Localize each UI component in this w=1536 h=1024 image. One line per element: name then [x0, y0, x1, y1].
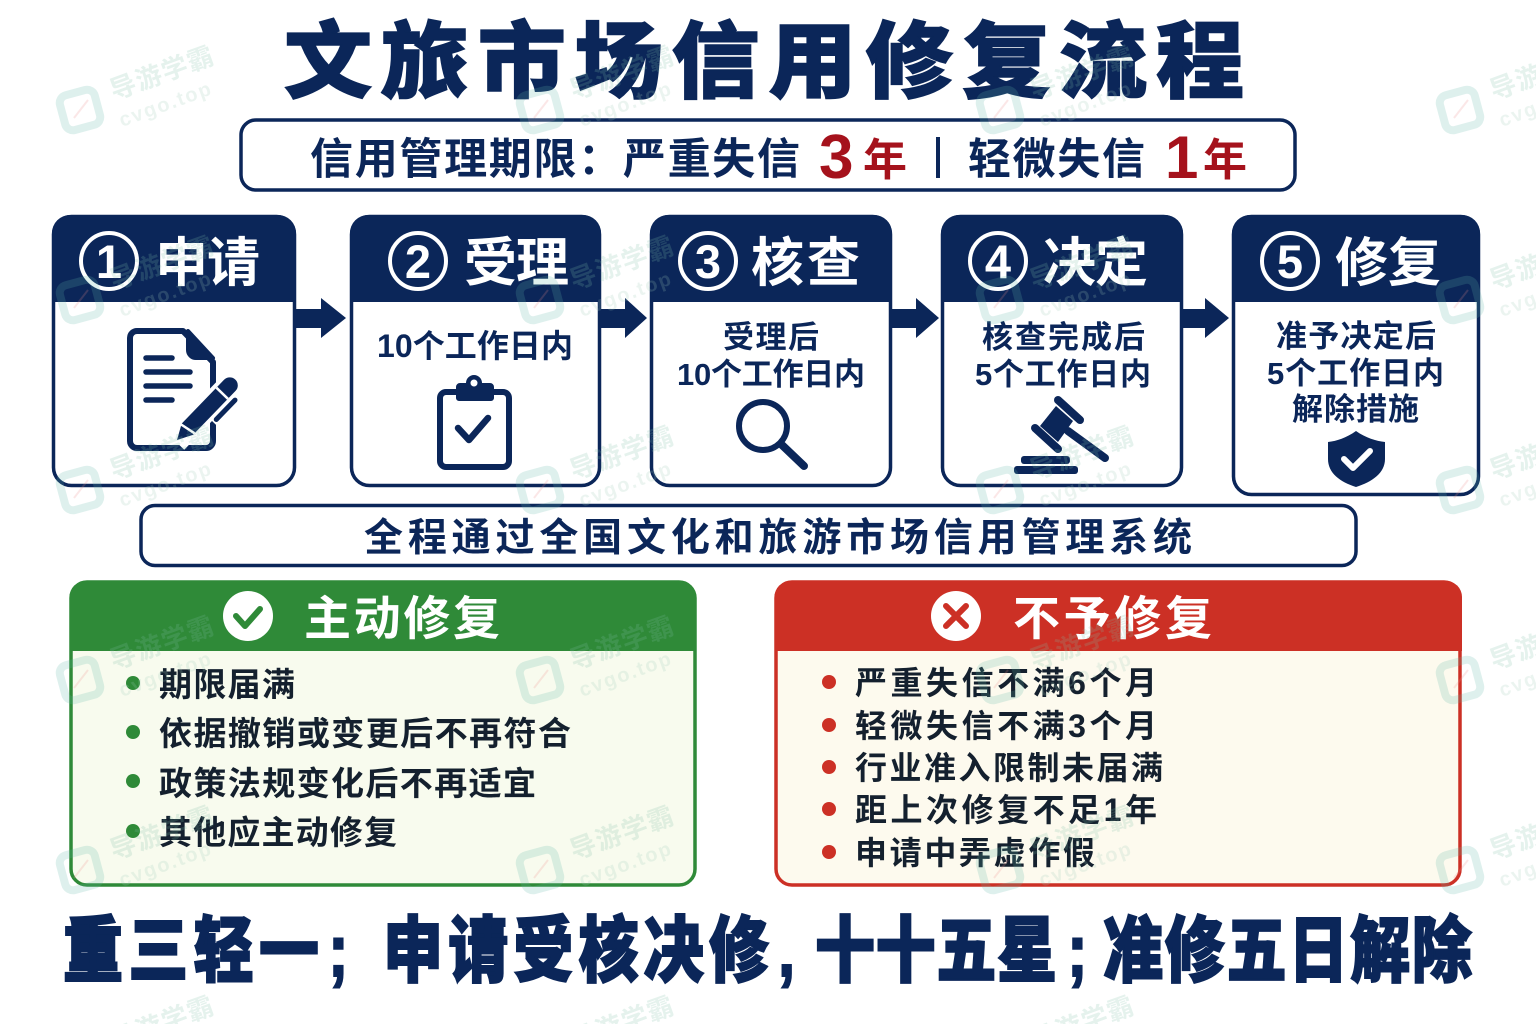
- text: 导游学霸: [1026, 41, 1138, 106]
- list: refusal conditions: 申请中弄虚作假: [855, 835, 1095, 871]
- title: 文旅市场信用修复流程: [284, 16, 1244, 110]
- text: cvgo.top: [1036, 268, 1134, 322]
- text: cvgo.top: [116, 78, 214, 132]
- text: cvgo.top: [1036, 458, 1134, 512]
- text: 导游学霸: [106, 421, 218, 486]
- text: 导游学霸: [566, 231, 678, 296]
- footer mnemonic: ;: [328, 909, 349, 992]
- text: cvgo.top: [1036, 838, 1134, 892]
- step 5 card: 修复: 修复: [1335, 234, 1441, 293]
- icon: document with pen: [130, 331, 252, 457]
- step 4 card: 决定: 决定: [1043, 234, 1148, 293]
- text: cvgo.top: [1036, 648, 1134, 702]
- heading: 不予修复: 不予修复: [1013, 592, 1212, 645]
- text: 导游学霸: [1026, 231, 1138, 296]
- footer mnemonic: 申请受核决修: [383, 912, 769, 992]
- panel: 主动修复: [70, 581, 696, 885]
- system banner: [141, 506, 1356, 566]
- step 3 time limit: [677, 320, 865, 392]
- subtitle banner: credit management period: 信用管理期限：严重失信: [310, 136, 800, 184]
- icon: clipboard with check: [440, 375, 509, 467]
- footer mnemonic: [63, 909, 1472, 992]
- text: 导游学霸: [106, 41, 218, 106]
- step 1 card: 申请: 申请: [155, 234, 260, 293]
- step 3 card: 核查: 3: [695, 235, 721, 288]
- list: repair conditions: 期限届满: [159, 666, 295, 703]
- step 3 card: 核查: 核查: [751, 234, 860, 293]
- arrow: step 4 to 5: [1183, 298, 1229, 338]
- subtitle banner: credit management period: [241, 120, 1295, 192]
- text: cvgo.top: [576, 648, 674, 702]
- step 1 card: 申请: 1: [96, 235, 122, 288]
- arrow: step 1 to 2: [295, 298, 346, 338]
- step 1 card: 申请: [52, 215, 296, 486]
- text: 导游学霸: [566, 611, 678, 676]
- text: cvgo.top: [116, 268, 214, 322]
- text: 导游学霸: [106, 611, 218, 676]
- step 5 time limit: 5个工作日内: [1267, 356, 1444, 391]
- footer mnemonic: 重三轻一: [63, 912, 319, 992]
- step 5 time limit: 准予决定后: [1276, 319, 1436, 354]
- step 2 card: 受理: [350, 215, 601, 486]
- step 4 card: 决定: [941, 215, 1183, 486]
- subtitle banner: credit management period: 1: [1165, 124, 1198, 191]
- footer mnemonic: 十十五星: [815, 912, 1057, 992]
- subtitle banner: credit management period: 年: [863, 136, 907, 185]
- text: 导游学霸: [566, 421, 678, 486]
- step 3 time limit: 10个工作日内: [677, 357, 865, 392]
- text: 导游学霸: [566, 41, 678, 106]
- footer mnemonic: 准修五日解除: [1103, 912, 1472, 992]
- list: repair conditions: 依据撤销或变更后不再符合: [159, 715, 571, 752]
- step 5 card: 修复: 5: [1277, 235, 1303, 288]
- subtitle banner: credit management period: 3: [819, 123, 853, 192]
- text: cvgo.top: [576, 838, 674, 892]
- heading: 主动修复: 主动修复: [304, 592, 500, 645]
- text: cvgo.top: [576, 458, 674, 512]
- text: cvgo.top: [1036, 78, 1134, 132]
- text: 导游学霸: [106, 801, 218, 866]
- text: cvgo.top: [116, 458, 214, 512]
- step 2 card: 受理: 受理: [464, 234, 569, 293]
- step 5 card: 修复: [1232, 215, 1480, 494]
- text: 导游学霸: [1026, 801, 1138, 866]
- list: refusal conditions: 距上次修复不足1年: [855, 792, 1157, 828]
- step 3 card: 核查: [650, 215, 892, 486]
- arrow: step 2 to 3: [600, 298, 647, 338]
- step 5 time limit: [1267, 319, 1444, 427]
- step 2 card: 受理: 2: [405, 235, 431, 288]
- text: 导游学霸: [1026, 611, 1138, 676]
- icon: gavel: [1014, 400, 1105, 474]
- footer mnemonic: ,: [778, 909, 795, 992]
- system banner: 全程通过全国文化和旅游市场信用管理系统: [364, 517, 1192, 560]
- step 4 card: 决定: 4: [985, 235, 1011, 288]
- list: refusal conditions: 行业准入限制未届满: [855, 750, 1163, 786]
- text: cvgo.top: [116, 838, 214, 892]
- list: repair conditions: [126, 666, 571, 851]
- list: refusal conditions: 轻微失信不满3个月: [855, 708, 1157, 744]
- text: cvgo.top: [576, 78, 674, 132]
- step 4 time limit: [975, 320, 1151, 392]
- list: repair conditions: 政策法规变化后不再适宜: [159, 765, 536, 802]
- icon: green check circle: [223, 591, 273, 641]
- list: repair conditions: 其他应主动修复: [159, 814, 397, 851]
- step 4 time limit: 核查完成后: [982, 320, 1145, 355]
- list: refusal conditions: 严重失信不满6个月: [855, 665, 1157, 701]
- list: refusal conditions: [822, 665, 1163, 871]
- icon: shield with check: [1328, 431, 1385, 487]
- step 5 time limit: 解除措施: [1292, 392, 1419, 427]
- footer mnemonic: ;: [1067, 909, 1088, 992]
- text: 导游学霸: [566, 801, 678, 866]
- arrow: step 3 to 4: [892, 298, 939, 338]
- text: 导游学霸: [106, 231, 218, 296]
- text: cvgo.top: [116, 648, 214, 702]
- step 4 time limit: 5个工作日内: [975, 357, 1151, 392]
- text: cvgo.top: [576, 268, 674, 322]
- panel: 不予修复: [774, 581, 1462, 885]
- text: 导游学霸: [1026, 421, 1138, 486]
- subtitle banner: credit management period: 年: [1203, 136, 1247, 185]
- subtitle banner: credit management period: 轻微失信: [968, 136, 1145, 184]
- step 3 time limit: 受理后: [723, 320, 819, 355]
- icon: magnifier: [739, 402, 804, 466]
- icon: red cross circle: [931, 591, 981, 641]
- step 2 time limit: 10个工作日内: [377, 328, 573, 364]
